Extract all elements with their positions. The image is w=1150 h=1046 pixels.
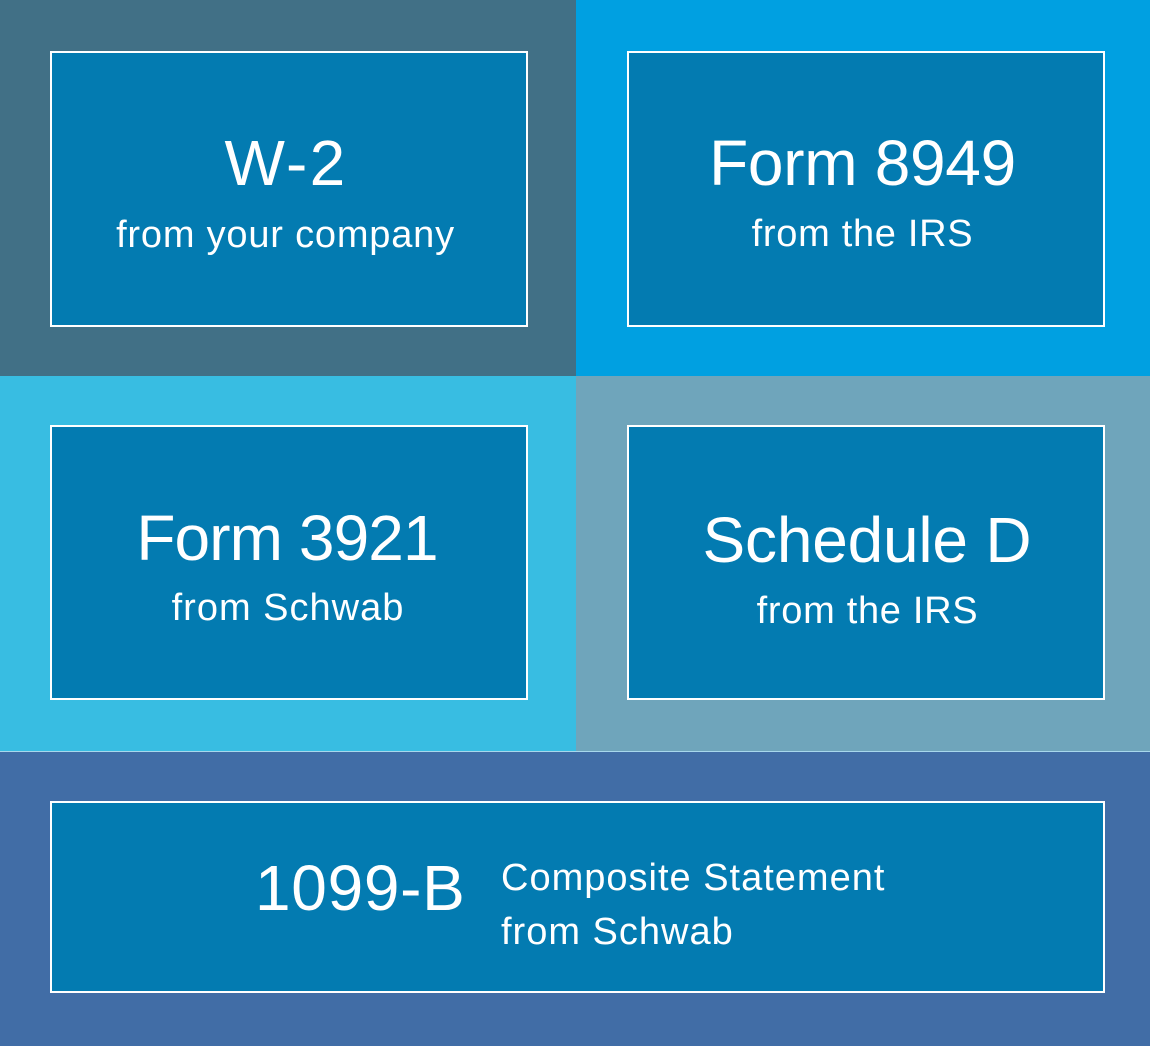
heading: 1099-B: 1099-B <box>255 852 466 924</box>
panel: Form 8949 <box>576 0 1150 376</box>
card: Form 3921 from Schwab <box>50 425 528 700</box>
panel: Form 3921 <box>0 376 576 752</box>
card: W-2 from your company <box>50 51 528 327</box>
card: Form 8949 from the IRS <box>627 51 1105 327</box>
text: Composite Statement from Schwab: from Schwab <box>501 911 734 953</box>
card: Schedule D from the IRS <box>627 425 1105 700</box>
panel: 1099-B <box>0 752 1150 1046</box>
text: from your company: from your company <box>116 214 455 256</box>
heading: Form 8949: Form 8949 <box>709 127 1016 199</box>
heading: W-2: W-2 <box>224 127 348 199</box>
text: Composite Statement from Schwab: Composite Statement <box>501 857 885 899</box>
text: from the IRS: from the IRS <box>752 213 973 255</box>
panel: Schedule D <box>576 376 1150 752</box>
text: from Schwab: from Schwab <box>172 587 404 629</box>
panel: W-2 <box>0 0 576 376</box>
card: 1099-B Composite Statement <box>50 801 1105 993</box>
heading: Form 3921: Form 3921 <box>136 502 438 574</box>
text: Composite Statement from Schwab <box>501 857 885 953</box>
text: from the IRS: from the IRS <box>757 590 978 632</box>
heading: Schedule D: Schedule D <box>703 504 1031 576</box>
